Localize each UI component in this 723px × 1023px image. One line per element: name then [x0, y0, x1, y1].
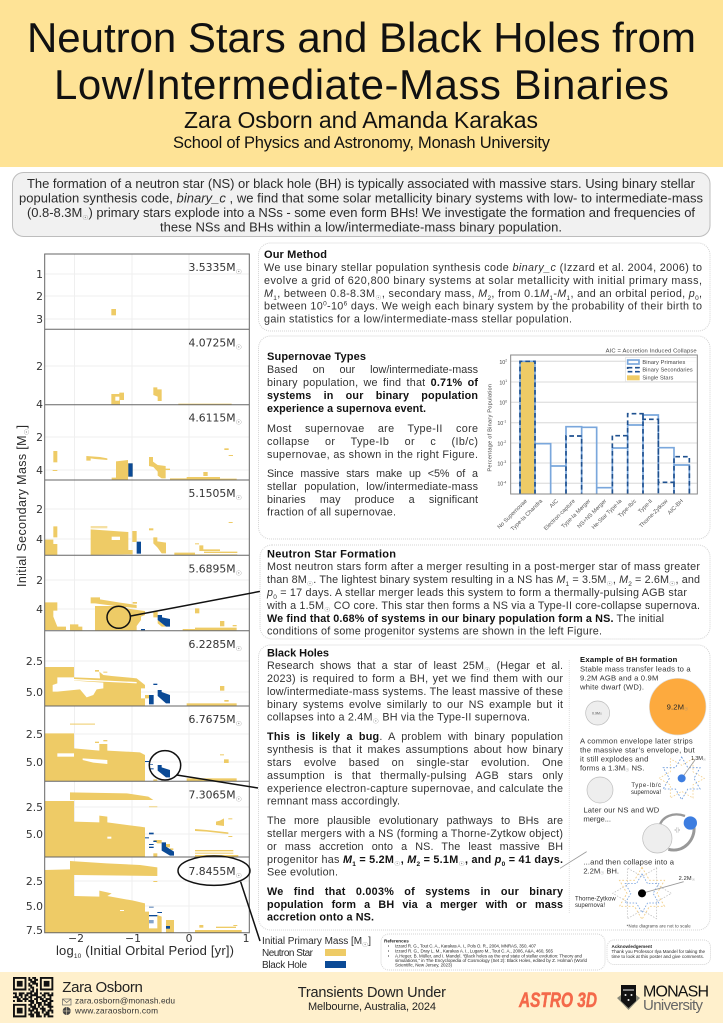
histogram legend: Single Stars	[642, 376, 674, 382]
histogram y axis: 10	[497, 461, 503, 467]
y tick labels: 5.0	[26, 900, 43, 913]
abstract panel: (0.8-8.3M☉) primary stars explode into a NSs - some even form BHs! We investigate the formation and frequencies of	[27, 205, 695, 222]
histogram y axis: 10	[499, 401, 505, 407]
footer band	[0, 972, 723, 1023]
legend: progenitor grid	[262, 936, 371, 971]
histogram category labels: No Supernovae	[497, 499, 529, 531]
x tick labels: −1	[125, 932, 141, 945]
histogram category labels: Type-Ia Chandra	[510, 498, 545, 533]
y tick labels: 2.5	[26, 655, 43, 668]
black holes text: Research shows that a star of least 25M☉ (Hegar et al.	[267, 660, 563, 674]
second caption	[580, 737, 696, 773]
panel: references: simulations,” in The Encyclopedia of Cosmology (Set 2): Black Holes, edited by Z. Holman (World	[395, 958, 587, 963]
method text: M1, between 0.8-8.3M☉, secondary mass, M2, from 0.1M1-M1, and an orbital period, p0,	[264, 288, 702, 302]
conference place: Melbourne, Australia, 2024	[308, 1001, 436, 1013]
second caption: the massive star’s envelope, but	[580, 746, 696, 755]
panel dividers and frame	[45, 254, 249, 933]
y tick labels: 2	[36, 574, 43, 587]
histogram y axis: Percentage of Binary Population	[487, 384, 493, 472]
primary mass labels: 4.0725M☉	[188, 336, 242, 351]
heading: our method: Our Method	[264, 249, 327, 261]
neutron star text: p0 = 17 days. A stellar merger leads this system to form a thermally-pulsing AGB star	[266, 587, 687, 600]
diagram: example of BH formation	[560, 655, 710, 931]
neutron star text: than 8M☉. The lightest binary system resulting in a NS has M1 = 3.5M☉, M2 = 2.6M☉, and	[267, 574, 700, 588]
fourth caption	[583, 858, 675, 876]
histogram y axis	[487, 359, 507, 488]
black holes text: stars evolve based on single-star evolution. One	[267, 757, 563, 769]
histogram y axis: 2	[505, 359, 507, 363]
icon: massive AGB star: 9.2M☉	[667, 703, 688, 712]
icon: stripped white dwarf	[587, 777, 613, 803]
black holes text: We find that 0.003% of systems in our binary	[267, 886, 563, 898]
primary mass labels: 5.1505M☉	[188, 487, 242, 502]
x tick labels: 1	[243, 932, 249, 945]
y tick labels: 2.5	[26, 801, 43, 814]
y tick labels: 5.0	[26, 686, 43, 699]
abstract panel: these NSs and BHs within a low/intermediate-mass binary population.	[160, 220, 562, 234]
panel: acknowledgement: Acknowledgement	[612, 944, 653, 949]
binary primaries outline	[520, 361, 689, 494]
histogram y axis: 10	[497, 482, 503, 488]
supernovae text: stellar population, low/intermediate-mass	[267, 481, 479, 493]
y tick labels: 4	[36, 533, 43, 546]
logo: Monash University: University	[643, 997, 704, 1014]
y tick labels: 4	[36, 398, 43, 411]
pointer line to evolution text	[560, 852, 587, 868]
affiliation: School of Physics and Astronomy, Monash University	[173, 134, 551, 152]
black holes text: This is likely a bug. A problem with binary population	[267, 731, 563, 743]
legend: progenitor grid: Neutron Star	[262, 948, 314, 959]
y axis label: Initial Secondary Mass [M☉]	[15, 425, 30, 587]
histogram category labels: Type-Ia Merger	[561, 498, 592, 530]
primary mass labels: 6.7675M☉	[188, 713, 242, 728]
black holes text: progenitor has M1 = 5.2M☉, M2 = 5.1M☉, and p0 = 41 days.	[267, 854, 563, 868]
histogram category labels: Type-II	[638, 498, 654, 515]
logo: Monash University	[617, 984, 709, 1014]
histogram y axis: -2	[503, 440, 506, 444]
y tick labels: 2	[36, 360, 43, 373]
supernovae text: collapse or Type-Ib or c (Ib/c)	[267, 436, 478, 448]
label: Thorne-Zytkow supernova	[575, 896, 616, 909]
black holes text: population form a BH via a merger with or mass	[267, 899, 563, 911]
panel: acknowledgement: Thank you Professor Ilya Mandel for taking the	[612, 949, 705, 954]
supernovae text: Since massive stars make up <5% of a	[267, 468, 478, 480]
histogram y axis: 10	[499, 380, 505, 386]
y tick labels: 5.0	[26, 756, 43, 769]
contact name: Zara Osborn	[62, 979, 143, 996]
panel: references: A.Heger, B. Müller, and I. Mandel. “Black holes as the end state of stellar evolution: Theory and	[395, 954, 582, 958]
panel: black holes	[258, 645, 710, 931]
example heading and first caption: 9.2M AGB and a 0.9M	[580, 674, 658, 683]
abstract panel: population synthesis code, binary_c , we find that some solar metallicity binary systems with low- to intermediate-mass	[19, 190, 704, 206]
contact website: www.zaraosborn.com	[74, 1006, 158, 1016]
abstract panel: The formation of a neutron star (NS) or black hole (BH) is typically associated with massive stars. Using binary stellar	[27, 176, 696, 191]
icon: white dwarf	[586, 701, 610, 725]
third caption: merge...	[583, 814, 611, 823]
histogram y axis: -3	[503, 460, 506, 464]
title: Low/Intermediate-Mass Binaries	[54, 61, 669, 108]
primary mass labels: 4.6115M☉	[188, 412, 242, 426]
histogram category labels: Type-Ib/c	[617, 498, 638, 519]
abstract panel	[12, 172, 710, 236]
histogram category labels	[497, 498, 685, 533]
third caption	[583, 805, 660, 823]
neutron star text	[266, 561, 700, 638]
histogram category labels: AIC-BH	[667, 499, 685, 516]
histogram y axis: 10	[499, 360, 505, 366]
black holes text: low/intermediate-mass systems. The least massive of these	[267, 686, 563, 698]
chart note: AIC definition: AIC = Accretion Induced Collapse	[606, 349, 697, 355]
black holes text: binary systems evolve similarly to our NS example but it	[267, 699, 563, 711]
example heading and first caption: Stable mass transfer leads to a	[580, 664, 691, 673]
method text	[264, 262, 702, 326]
note: *Note diagrams are not to scale	[627, 923, 691, 928]
black holes text: synthesis is that it makes assumptions about how binary	[267, 744, 564, 756]
panel: references: Izzard R. G., Tout C. A., Karakas A. I., Pols O. R., 2004, MNRAS, 350, 407	[395, 944, 536, 948]
second caption: forms a 1.3M☉ NS.	[580, 764, 644, 773]
logo: ASTRO 3D: ASTRO 3D	[518, 989, 597, 1012]
supernovae text: fraction of all supernovae.	[267, 506, 396, 518]
panel: acknowledgement: time to look at this poster and give comments.	[612, 954, 704, 959]
icon: Thorne-Zytkow supernova star with BH: 2.2M☉	[679, 876, 695, 882]
supernovae text	[267, 364, 479, 518]
supernovae text: systems in our binary population	[267, 390, 478, 402]
example heading and first caption: Example of BH formation	[580, 655, 678, 664]
y tick labels: 2	[36, 290, 43, 303]
y tick labels: 4	[36, 603, 43, 616]
label: Thorne-Zytkow supernova: supernova!	[575, 903, 605, 909]
y tick labels: 1	[36, 268, 43, 281]
neutron star text: We find that 0.68% of systems in our binary population form a NS. The initial	[267, 613, 664, 625]
legend: progenitor grid: Black Hole	[262, 960, 307, 971]
histogram y axis: -4	[503, 480, 506, 484]
histogram category labels: Electron-capture	[543, 499, 577, 532]
method text: between 100-106 days. We weigh each binary system by the probability of their birth to	[264, 300, 702, 312]
neutron star text: Most neutron stars form after a merger resulting in a post-merger star of mass greater	[267, 561, 700, 573]
primary mass labels: 3.5335M☉	[188, 261, 242, 276]
panel: references: References	[384, 938, 409, 944]
y tick labels	[26, 268, 43, 937]
method text: We use binary stellar population synthesis code binary_c (Izzard et al. 2004, 2006) to	[264, 262, 702, 274]
primary mass labels: 7.3065M☉	[188, 788, 242, 803]
primary mass labels: 6.2285M☉	[188, 638, 242, 652]
black holes text: or mass accretion onto a NS. The least massive BH	[267, 841, 563, 853]
supernovae text: Most supernovae are Type-II core	[267, 423, 478, 435]
black holes text	[267, 660, 564, 924]
primary mass labels	[188, 261, 242, 880]
histogram y axis: -1	[503, 420, 506, 424]
black holes text: remnant mass accordingly.	[267, 796, 400, 808]
y tick labels: 7.5	[26, 924, 43, 937]
label: Type-Ib/c supernova: supernova!	[631, 790, 661, 796]
binary secondaries dashed outline	[520, 361, 689, 494]
panel: our method	[258, 243, 710, 331]
primary mass labels: 5.6895M☉	[188, 562, 242, 577]
y tick labels: 2.5	[26, 875, 43, 888]
histogram y axis: 10	[497, 441, 503, 447]
neutron star text: conditions of some progenitor systems are shown in the left Figure.	[267, 626, 602, 638]
panel: references: Izzard R. G., Dray L. M., Karakas A. I., Lugaro M., Tout C. A., 2006, A&A, 460, 565	[395, 948, 553, 954]
QR code	[13, 978, 53, 1016]
panel: supernovae types	[258, 336, 710, 539]
second caption: it still explodes and	[580, 755, 648, 764]
black holes text: The more plausible evolutionary pathways to BHs are	[267, 815, 563, 827]
histogram legend: Binary Primaries	[642, 360, 686, 366]
method text: gain statistics for a low/intermediate-mass stellar population.	[264, 314, 572, 326]
icon: Type-Ib/c supernova star with NS: 1.3M☉	[691, 756, 706, 762]
panel grid and frame	[45, 254, 249, 933]
chart: progenitor grid small multiples	[15, 254, 249, 960]
method text: evolve a grid of 620,800 binary systems at solar metallicity with initial primary mass,	[264, 275, 702, 287]
legend: progenitor grid: Initial Primary Mass [M☉]	[262, 936, 371, 948]
histogram category labels: AIC	[549, 499, 560, 509]
black holes text: See evolution.	[267, 866, 338, 878]
title: Neutron Stars and Black Holes from	[27, 14, 696, 61]
y tick labels: 4	[36, 464, 43, 477]
x tick labels: 0	[186, 932, 193, 945]
y tick labels: 3	[36, 313, 43, 326]
panel: references	[381, 934, 605, 970]
histogram category labels: He-Star Type-Ia	[591, 498, 624, 531]
heading: black holes: Black Holes	[267, 648, 329, 660]
histogram category labels: Thorne-Zytkow	[638, 498, 670, 529]
second caption: A common envelope later strips	[580, 737, 693, 746]
supernovae text: supernovae, as shown in the right Figure.	[267, 449, 478, 461]
y tick labels: 2.5	[26, 728, 43, 741]
example heading and first caption	[579, 655, 691, 692]
third caption: Later our NS and WD	[583, 805, 660, 814]
upper panel data: neutron star and black hole regions	[45, 309, 237, 630]
icon: NS and WD merger	[643, 814, 697, 853]
header band	[0, 0, 723, 167]
histogram y axis: 1	[505, 379, 507, 383]
y tick labels: 2	[36, 431, 43, 444]
conference name: Transients Down Under	[298, 985, 446, 1001]
histogram y axis: 0	[505, 399, 507, 403]
histogram legend: Binary Secondaries	[642, 368, 693, 374]
x tick labels: −2	[68, 932, 84, 945]
black holes text: experience electron-capture supernovae, and calculate the	[267, 783, 563, 795]
black holes text: collapses into a 2.4M☉ BH via the Type-II supernova.	[267, 712, 530, 725]
callout: black hole region circle and leader	[149, 751, 258, 788]
primary mass labels: 7.8455M☉	[188, 865, 242, 880]
label: Thorne-Zytkow supernova: Thorne-Zytkow	[575, 896, 616, 902]
supernovae text: binary population, we find that 0.71% of	[267, 377, 478, 389]
callout: 7.8455 mass ellipse and leader	[178, 856, 260, 941]
label: Type-Ib/c supernova	[631, 783, 661, 796]
black holes text: 2023) is required to form a BH, yet we find them with our	[267, 673, 563, 685]
panel: neutron star formation	[260, 545, 710, 639]
histogram y axis: 10	[497, 421, 503, 427]
histogram category labels: NS+NS Merger	[577, 498, 608, 530]
example heading and first caption: white dwarf (WD).	[579, 683, 644, 692]
label: Type-Ib/c supernova: Type-Ib/c	[631, 783, 661, 789]
x axis label: log10 (Initial Orbital Period [yr])	[56, 943, 234, 960]
histogram legend	[626, 357, 697, 382]
panel: references: Scientific, New Jersey, 2023)	[395, 962, 452, 968]
icon: massive AGB star	[649, 678, 706, 735]
heading: supernovae types: Supernovae Types	[267, 351, 366, 363]
lower panel data: neutron star and black hole regions	[45, 667, 242, 933]
title	[27, 14, 696, 108]
black holes text: assumption is that thermally-pulsing AGB stars only	[267, 770, 564, 782]
icon: Thorne-Zytkow supernova star with BH	[605, 855, 695, 931]
black holes text: accretion onto a NS.	[267, 912, 374, 924]
authors: Zara Osborn and Amanda Karakas	[184, 107, 538, 133]
heading: neutron star formation: Neutron Star Formation	[267, 548, 396, 560]
x tick labels	[68, 932, 249, 945]
fourth caption: ...and then collapse into a	[583, 858, 675, 867]
icon: Type-Ib/c supernova star with NS	[653, 749, 710, 808]
black holes text: stellar mergers with a NS (forming a Thorne-Zytkow object)	[267, 828, 563, 840]
y tick labels: 2	[36, 503, 43, 516]
panel: acknowledgement	[607, 940, 710, 964]
neutron star text: with a 1.5M☉ CO core. This star then forms a NS via a Type-II core-collapse supernova.	[266, 600, 700, 614]
chart: supernova type histogram	[487, 349, 697, 533]
callout: neutron star example circle and leader	[107, 591, 262, 628]
y tick labels: 5.0	[26, 828, 43, 841]
logo: Monash University: MONASH	[643, 984, 709, 1000]
supernovae text: Based on our low/intermediate-mass	[267, 364, 479, 376]
supernovae text: experience a supernova event.	[267, 403, 426, 415]
supernovae text: binaries may produce a significant	[267, 494, 478, 506]
icon: white dwarf: 0.9M ☉	[592, 711, 602, 715]
fourth caption: 2.2M☉ BH.	[583, 867, 619, 876]
contact email: zara.osborn@monash.edu	[75, 996, 175, 1006]
